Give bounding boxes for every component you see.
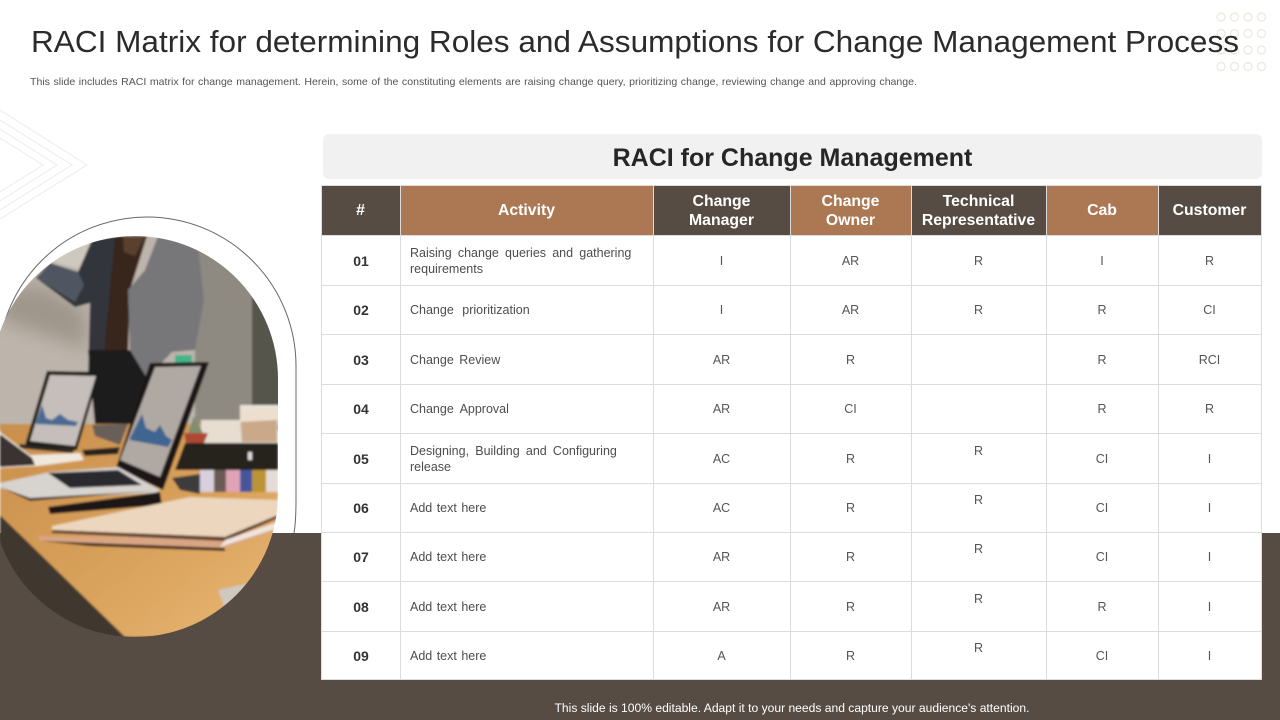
RACI table: 06 <box>353 500 369 516</box>
RACI table: R <box>974 493 983 507</box>
RACI table: AC <box>713 501 730 515</box>
photo: front laptop <box>0 362 209 501</box>
RACI table: R <box>974 640 983 654</box>
RACI table: Add text here <box>410 501 486 515</box>
photo: papers on desk left <box>0 432 84 468</box>
RACI table: AR <box>713 550 730 564</box>
RACI table: AR <box>842 303 859 317</box>
RACI table: AR <box>713 402 730 416</box>
RACI table: CI <box>1096 550 1108 564</box>
RACI table: Change <box>693 192 750 210</box>
RACI table: I <box>1208 452 1211 466</box>
RACI table: I <box>720 254 723 268</box>
RACI table: 07 <box>353 549 369 565</box>
RACI table: I <box>1208 550 1211 564</box>
RACI table: A <box>717 648 726 662</box>
RACI table: Cab <box>1087 202 1117 219</box>
RACI table: 09 <box>353 648 369 664</box>
photo: right desk objects <box>172 408 278 494</box>
RACI table: 02 <box>353 302 369 318</box>
photo: phone <box>48 492 162 514</box>
RACI table: 04 <box>353 401 369 417</box>
decorative dots grid <box>1216 12 1266 71</box>
subtitle description: This slide includes RACI matrix for change management. Herein, some of the constituting elements are raising change query, prioritizing change, reviewing change and approving change. <box>30 77 917 88</box>
RACI table: Change Review <box>410 352 500 366</box>
RACI table: Change Approval <box>410 402 509 416</box>
photo: rear laptop <box>18 371 100 453</box>
RACI table: Designing, Building and Configuring release <box>410 444 617 474</box>
photo: notebooks <box>38 497 278 551</box>
RACI table: AR <box>713 352 730 366</box>
RACI table: Representative <box>922 212 1035 228</box>
RACI table: CI <box>844 402 857 416</box>
RACI table: R <box>846 600 855 614</box>
RACI table: R <box>846 352 855 366</box>
RACI table: R <box>1205 254 1214 268</box>
RACI table: 03 <box>353 352 369 368</box>
RACI table: R <box>974 542 983 556</box>
RACI table: CI <box>1096 648 1108 662</box>
photo: office desk with laptops <box>0 236 278 637</box>
title: RACI Matrix for determining Roles and Assumptions for Change Management Process <box>31 24 1239 59</box>
RACI table: 01 <box>353 252 369 268</box>
RACI table: R <box>974 303 983 317</box>
RACI table: Change <box>822 192 879 210</box>
RACI table: I <box>720 303 723 317</box>
RACI table: Technical <box>943 192 1014 210</box>
RACI table: R <box>1097 600 1107 614</box>
RACI table: RCI <box>1199 352 1220 366</box>
RACI table: Raising change queries and gathering requirements <box>410 246 631 276</box>
RACI table: R <box>1097 352 1107 366</box>
RACI table: 08 <box>353 598 369 614</box>
RACI table: R <box>974 254 983 268</box>
RACI table: I <box>1208 501 1211 515</box>
RACI table: Change prioritization <box>410 303 530 317</box>
RACI table: AR <box>842 254 859 268</box>
photo: arch outline <box>4 216 296 533</box>
heading panel: RACI for Change Management: RACI for Change Management <box>613 144 972 172</box>
RACI table: R <box>1205 402 1214 416</box>
RACI table: I <box>1100 254 1104 268</box>
RACI table: R <box>1097 303 1107 317</box>
RACI table: Manager <box>689 212 754 228</box>
RACI table: Owner <box>826 212 875 228</box>
RACI table: CI <box>1203 303 1216 317</box>
RACI table: CI <box>1096 501 1108 515</box>
RACI table: R <box>846 501 855 515</box>
RACI table: I <box>1208 600 1211 614</box>
footer note: This slide is 100% editable. Adapt it to your needs and capture your audience's attention. <box>555 701 1029 715</box>
RACI table: Add text here <box>410 600 486 614</box>
RACI table: Activity <box>498 202 555 219</box>
RACI table: R <box>974 444 983 458</box>
RACI table: R <box>974 592 983 606</box>
RACI table: # <box>356 202 365 219</box>
RACI table: 05 <box>353 450 369 466</box>
RACI table: Add text here <box>410 550 486 564</box>
RACI table: R <box>846 648 855 662</box>
RACI table: CI <box>1096 452 1108 466</box>
RACI table: AR <box>713 600 730 614</box>
RACI table: R <box>846 452 855 466</box>
RACI table: I <box>1208 648 1211 662</box>
decorative background band <box>0 533 1280 720</box>
RACI table: Customer <box>1173 202 1246 219</box>
RACI table: Add text here <box>410 648 486 662</box>
decorative chevron lines <box>0 110 88 220</box>
RACI table: R <box>1097 402 1107 416</box>
RACI table: AC <box>713 452 730 466</box>
heading panel: RACI for Change Management <box>323 134 1262 179</box>
RACI table <box>321 185 1262 680</box>
RACI table: R <box>846 550 855 564</box>
